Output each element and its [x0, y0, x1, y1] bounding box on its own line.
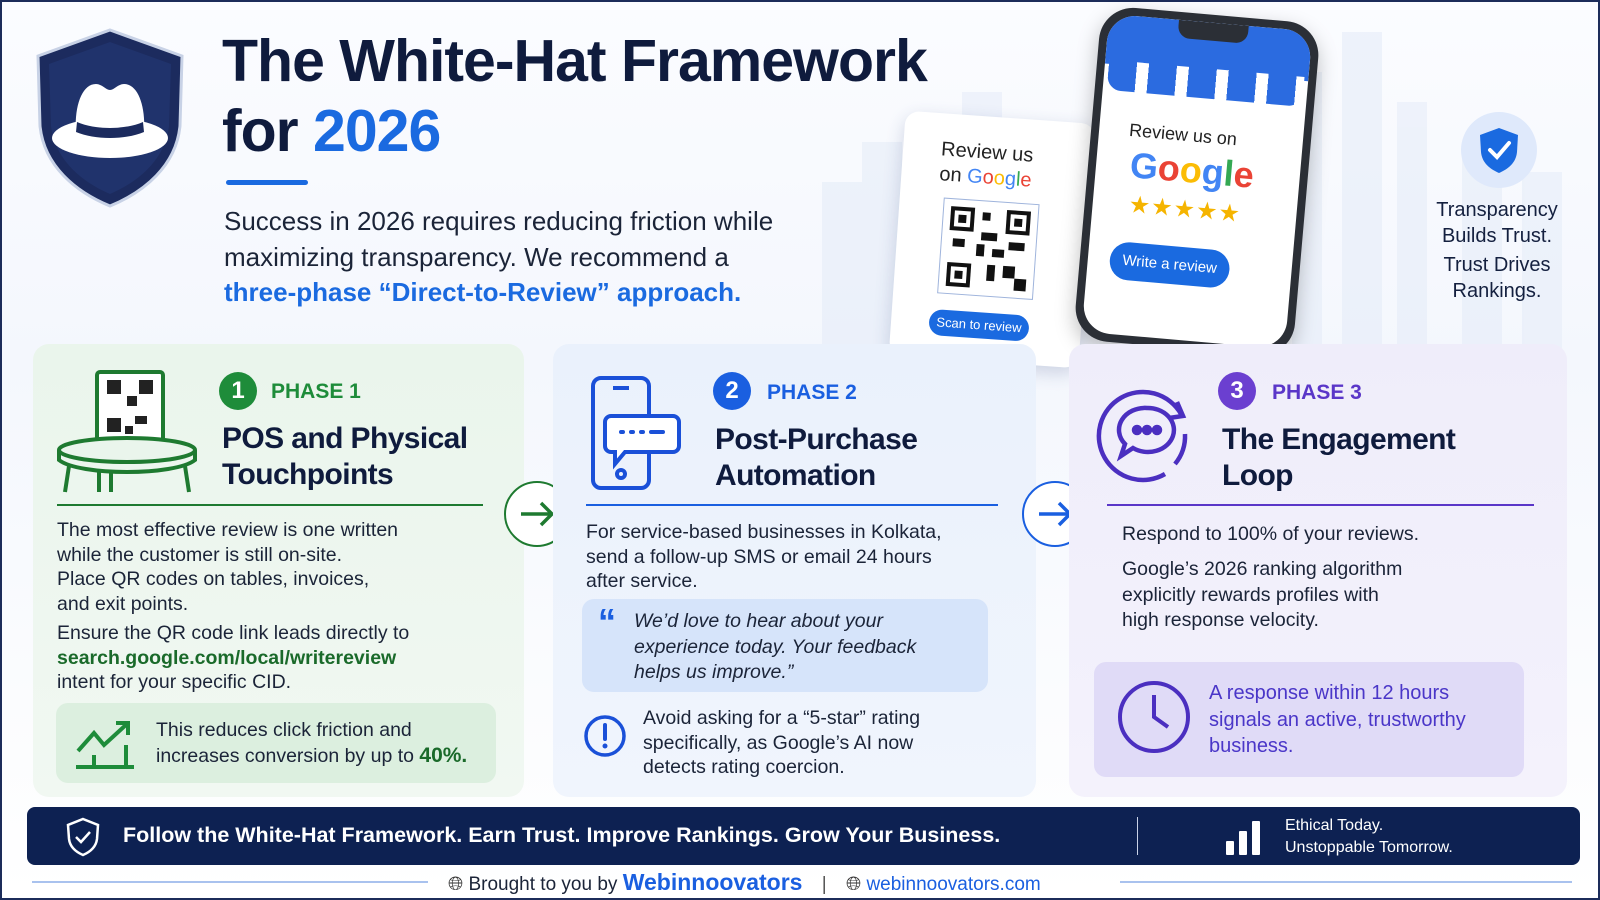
footer banner: Unstoppable Tomorrow. [1285, 839, 1453, 856]
panel: phase 1: POS and Physical [222, 422, 468, 455]
panel: phase 3: high response velocity. [1122, 609, 1319, 631]
panel: phase 3: Google’s 2026 ranking algorithm [1122, 558, 1402, 580]
trust badge: Builds Trust. [1442, 224, 1552, 246]
panel: phase 3: 3 [1230, 377, 1244, 404]
quote box: experience today. Your feedback [634, 636, 916, 658]
QR card: Review us [940, 138, 1034, 167]
subtitle: three-phase “Direct-to-Review” approach. [224, 277, 741, 307]
title [222, 28, 928, 164]
text: phase 1 body: and exit points. [57, 592, 188, 614]
subtitle: Success in 2026 requires reducing friction while [224, 206, 773, 236]
panel: phase 2: 2 [725, 377, 739, 404]
footer banner: Follow the White-Hat Framework. Earn Trust. Improve Rankings. Grow Your Business. [123, 823, 1000, 847]
text: phase 3 body: Respond to 100% of your reviews. [1122, 523, 1419, 545]
background city skyline [822, 32, 1562, 348]
text: 🌐︎ Brought to you by Webinnoovators | 🌐︎ webinnoovators.com [448, 869, 1041, 895]
QR card: Scan to review [936, 314, 1022, 335]
icon: engagement loop [1096, 390, 1188, 482]
trust badge [1436, 112, 1558, 302]
warning note: detects rating coercion. [643, 756, 845, 778]
callout: 12 hours: A response within 12 hours [1209, 682, 1449, 704]
panel: phase 3: Loop [1222, 459, 1293, 492]
quote box [582, 599, 988, 692]
quote box: “ [598, 601, 616, 642]
panel: phase 3 [1069, 344, 1567, 797]
footer banner [27, 807, 1580, 865]
credit line [32, 881, 428, 883]
callout: 12 hours [1094, 662, 1524, 777]
title: The White-Hat Framework [222, 28, 927, 94]
icon: QR table [57, 370, 197, 492]
subtitle: maximizing transparency. We recommend a [224, 242, 729, 272]
text: phase 1 body: The most effective review is one written [57, 519, 398, 541]
phone mockup: Google [1128, 144, 1256, 196]
panel: phase 1: search.google.com/local/writereview [57, 646, 396, 668]
panel: phase 2 [553, 344, 1036, 797]
panel: phase 1: intent for your specific CID. [57, 671, 291, 693]
icon: phone message [591, 376, 681, 490]
heading: phase 3: PHASE 3 [1272, 381, 1362, 404]
logo: shield with hat [36, 28, 184, 208]
phone mockup [1073, 5, 1321, 358]
panel: phase 2: Post-Purchase [715, 423, 917, 456]
phone mockup: ★★★★★ [1128, 191, 1242, 228]
QR card [889, 111, 1095, 368]
heading: phase 2: PHASE 2 [767, 381, 857, 404]
phone mockup: Write a review [1122, 252, 1218, 277]
text: phase 1 body [57, 519, 398, 614]
subtitle [224, 206, 773, 307]
trust badge: Transparency [1436, 199, 1558, 221]
panel: phase 2: Automation [715, 459, 876, 492]
text: phase 2 body: send a follow-up SMS or email 24 hours [586, 546, 932, 568]
panel: phase 3: explicitly rewards profiles with [1122, 584, 1379, 606]
text: phase 1 body: while the customer is still on-site. [57, 544, 342, 566]
text: phase 2 body: For service-based businesses in Kolkata, [586, 521, 942, 543]
callout: 40%: This reduces click friction and [156, 719, 412, 741]
panel: phase 1 [33, 344, 524, 797]
arrow 1 [504, 481, 553, 547]
callout: 40% [56, 703, 496, 783]
text: phase 1 body: Place QR codes on tables, invoices, [57, 568, 369, 590]
heading: phase 1: PHASE 1 [271, 380, 361, 403]
quote box: We’d love to hear about your [634, 610, 883, 632]
warning note: specifically, as Google’s AI now [643, 732, 913, 754]
callout: 12 hours: signals an active, trustworthy [1209, 708, 1466, 730]
callout: 40%: increases conversion by up to 40%. [156, 744, 467, 767]
warning note [584, 707, 920, 778]
panel: phase 1: Touchpoints [222, 458, 393, 491]
trust badge: Rankings. [1453, 280, 1541, 302]
callout: 12 hours: business. [1209, 735, 1294, 757]
arrow 2 [1022, 481, 1069, 547]
trust badge: Trust Drives [1443, 254, 1551, 276]
text: phase 2 body: after service. [586, 570, 698, 592]
QR card: on Google [939, 163, 1032, 192]
text: phase 2 body [586, 521, 942, 592]
panel: phase 1: 1 [231, 377, 245, 404]
title: for 2026 [222, 98, 440, 164]
phone mockup: Review us on [1128, 120, 1238, 149]
footer banner: Ethical Today. [1285, 817, 1383, 834]
panel: phase 1: Ensure the QR code link leads directly to [57, 622, 409, 644]
quote box: helps us improve.” [634, 661, 793, 683]
panel: phase 3: The Engagement [1222, 423, 1455, 456]
warning note: Avoid asking for a “5-star” rating [643, 707, 920, 729]
